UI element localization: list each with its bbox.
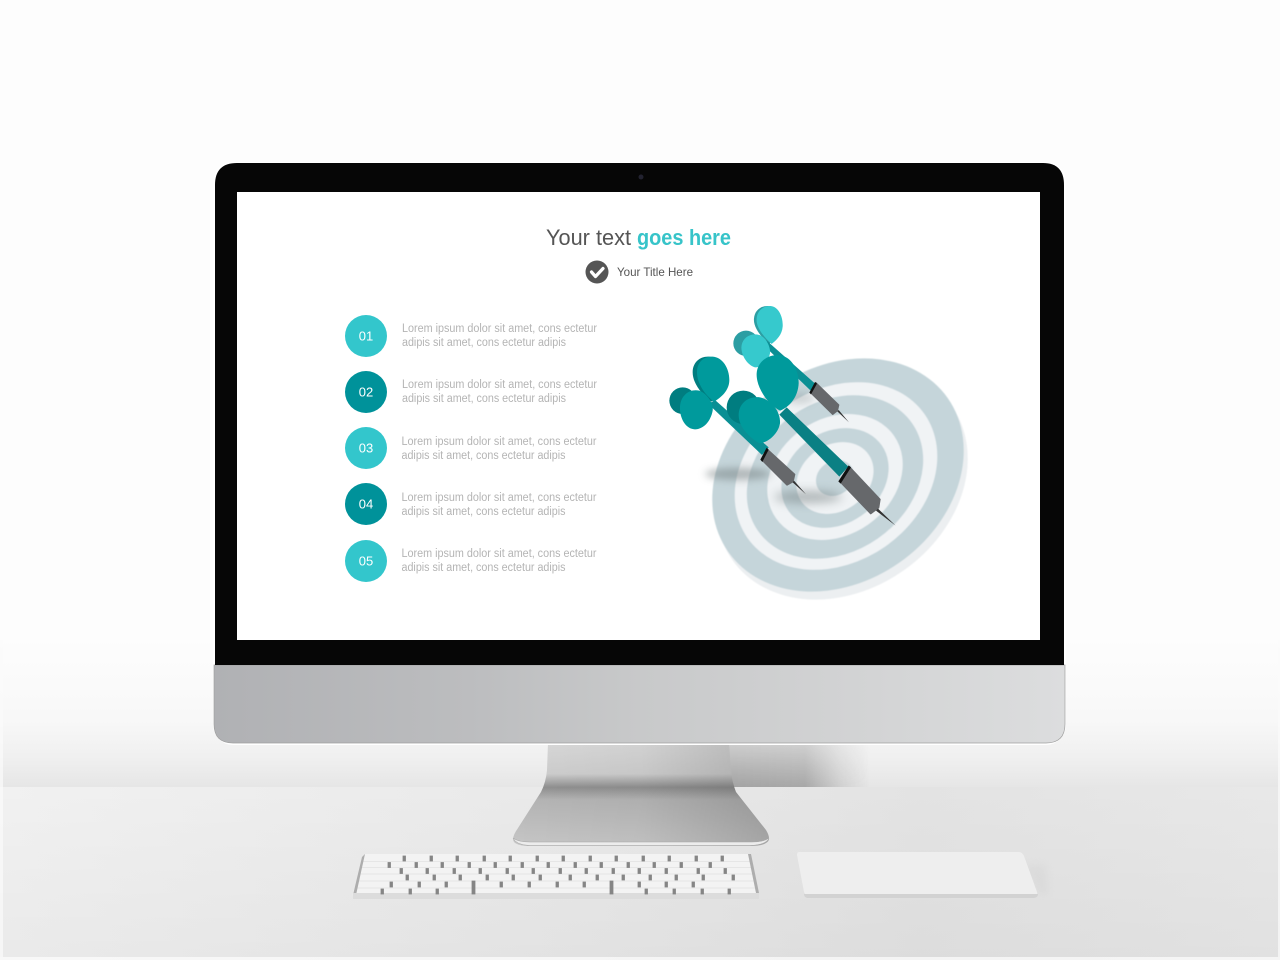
trackpad shadow xyxy=(1024,865,1048,895)
list item 01: 01 xyxy=(359,328,373,344)
list item 04: Lorem ipsum dolor sit amet, cons ectetur xyxy=(402,492,597,504)
list item 01 xyxy=(345,315,597,357)
webcam xyxy=(638,174,644,180)
monitor stand xyxy=(513,743,769,846)
slide screen xyxy=(237,192,1040,640)
list item 01: adipis sit amet, cons ectetur adipis xyxy=(402,337,566,349)
list item 02: 02 xyxy=(359,384,373,400)
desk surface xyxy=(0,787,1280,960)
keys gaps xyxy=(381,856,734,894)
keyboard front edge xyxy=(353,893,759,899)
keyboard body xyxy=(353,854,759,899)
dart shadows xyxy=(705,392,842,503)
stand wall shadow xyxy=(729,745,860,787)
list item 03: 03 xyxy=(359,440,373,456)
list item 02 xyxy=(345,371,597,413)
desk vertical shading xyxy=(0,787,1280,957)
subtitle text: Your Title Here xyxy=(617,265,693,279)
dart: front teal xyxy=(757,355,896,526)
monitor chin xyxy=(214,665,1065,743)
list item 05: Lorem ipsum dolor sit amet, cons ectetur xyxy=(402,548,597,560)
monitor bezel xyxy=(215,163,1064,665)
list item 05: 05 xyxy=(359,554,373,568)
list item 02: Lorem ipsum dolor sit amet, cons ectetur xyxy=(402,379,597,391)
title: Your text xyxy=(546,225,631,250)
image border strips xyxy=(0,640,1280,960)
list item 04: adipis sit amet, cons ectetur adipis xyxy=(402,506,566,518)
dart: middle teal xyxy=(669,357,806,494)
keyboard edges xyxy=(353,854,759,895)
dart: top light teal xyxy=(733,306,849,422)
trackpad front edge xyxy=(804,894,1038,898)
icon: dartboard with darts xyxy=(667,306,1013,648)
subtitle with check icon xyxy=(586,260,693,284)
monitor halo xyxy=(213,162,1066,745)
list item 02: adipis sit amet, cons ectetur adipis xyxy=(402,393,566,405)
key row lines xyxy=(356,862,757,888)
list item 03 xyxy=(345,427,597,469)
dartboard xyxy=(667,310,1013,648)
keyboard xyxy=(353,854,759,899)
list item 05: adipis sit amet, cons ectetur adipis xyxy=(402,562,566,574)
title: goes here xyxy=(637,225,731,250)
list item 01: Lorem ipsum dolor sit amet, cons ectetur xyxy=(402,323,597,335)
stand base rim xyxy=(513,838,769,846)
trackpad xyxy=(797,852,1048,898)
monitor xyxy=(213,162,1066,745)
title xyxy=(546,225,731,250)
icon: check mark badge xyxy=(586,260,608,284)
list item 04 xyxy=(345,483,597,525)
list item 04: 04 xyxy=(359,496,373,512)
list item 03: Lorem ipsum dolor sit amet, cons ectetur xyxy=(402,436,597,448)
trackpad top surface xyxy=(797,852,1037,895)
list item 03: adipis sit amet, cons ectetur adipis xyxy=(402,450,566,462)
list item 05 xyxy=(345,540,597,582)
